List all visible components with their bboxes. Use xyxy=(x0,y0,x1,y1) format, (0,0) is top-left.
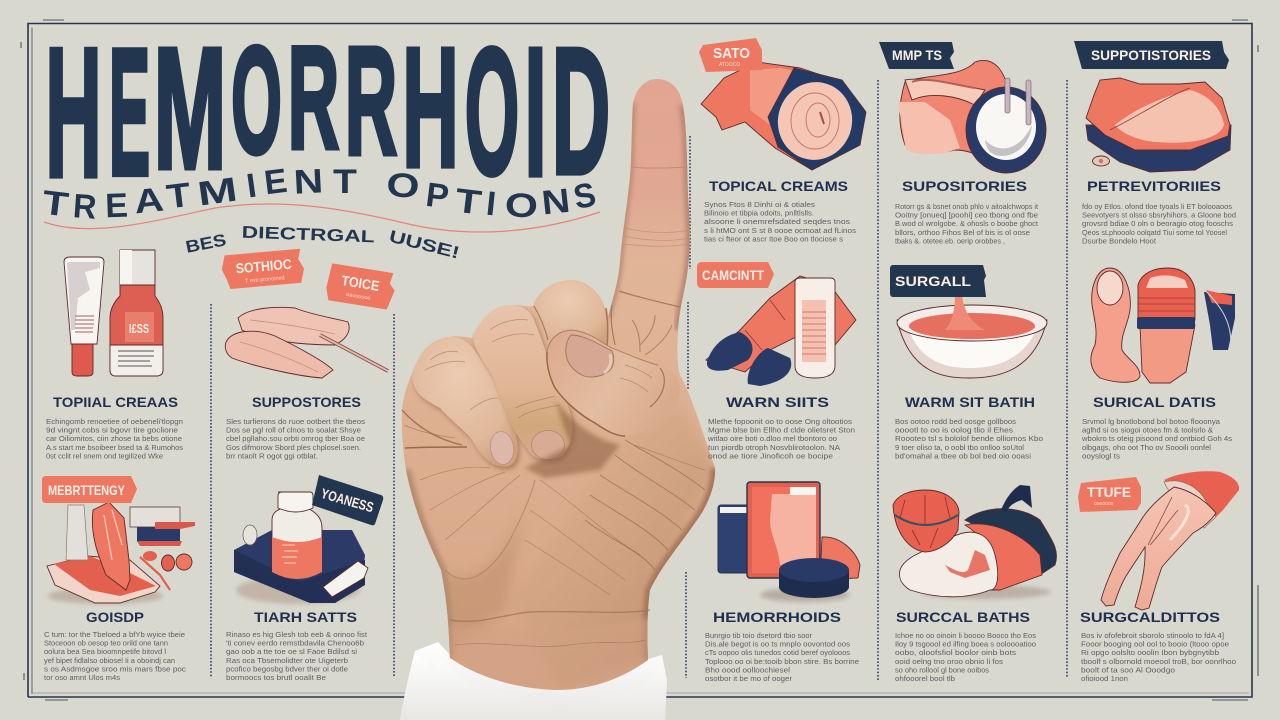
body text: olbgags, oho oot Tho ov Soooili oonfel xyxy=(1082,443,1211,452)
pinky fold xyxy=(402,410,520,540)
body text: Bilinoio et tibpia odoits, pnlltlslls. xyxy=(704,209,814,218)
body text: tun piordb otroph Nosvblirotoolon. NA xyxy=(708,443,841,452)
badge: YOANESS: YOANESS xyxy=(319,485,376,515)
thumbnail xyxy=(566,335,614,377)
body text: tbaks &. otetee.eb. oerip orobbes , xyxy=(895,236,1005,245)
body text: Bunrgio tib toio dsetord tbio soor xyxy=(705,631,812,640)
badge: SUPPOTISTORIES: SUPPOTISTORIES xyxy=(1091,47,1211,63)
body text: bormoocs tos brutl ooalit Be xyxy=(226,673,326,682)
body text: cTs oopoo olis tunedos cotid beref oyolooos xyxy=(705,648,850,657)
panel: warm sit bath xyxy=(890,265,1047,460)
body text xyxy=(46,417,183,460)
body text: Qeos sLphooolo oolqatd Tiui some tol Yoosel xyxy=(1082,228,1227,237)
body text: boolt of ta soo Al Ooodgo xyxy=(1081,665,1175,674)
panel: supositories (right top) xyxy=(879,42,1046,245)
subtitle: TREATMENT OPTIONS: T xyxy=(164,175,193,216)
body text: Fooor booging ool ool to booio (ltooo opoe xyxy=(1081,640,1229,649)
body text: Roooteo tsl s bololof bende olliomos Kbo xyxy=(895,434,1043,443)
body text: osotbor it be mo of ooger xyxy=(705,674,792,683)
subtitle: TREATMENT OPTIONS: T xyxy=(333,162,357,200)
body text xyxy=(895,202,1039,245)
badge: CAMCINTT: CAMCINTT xyxy=(702,267,764,283)
main title: HEMORRHOID: H xyxy=(45,9,102,215)
body text: Dis.ale begot is oo ts mnplo oovontod oos xyxy=(705,640,850,649)
badge: TOICE: TOICE xyxy=(340,272,380,294)
body text: Ri opgo oolslto ooolin Ibon bybgnytibb xyxy=(1081,648,1219,657)
body text: Ichoe no oo oinoin li boooo Booco tho Eos xyxy=(895,631,1036,640)
heading: WARM SIT BATIH xyxy=(905,394,1035,410)
body text: tor oso amnt Ulos m4s xyxy=(44,673,120,682)
main title: HEMORRHOID: I xyxy=(524,9,547,214)
heading: PETREVITORIIES xyxy=(1087,178,1221,194)
icon: coral wraps with tube xyxy=(706,276,856,386)
heading: TIARH SATTS xyxy=(254,609,357,625)
body text: B.wod ol wrolgobe. & ohosls o boobe ghoct xyxy=(895,219,1039,228)
badge: MEBRTTENGY xyxy=(42,476,137,503)
icon: cream tube and bottle: I£SS xyxy=(129,321,149,336)
subtitle: TREATMENT OPTIONS: I xyxy=(244,167,259,206)
panel: petrevitories (right top) xyxy=(1074,41,1236,245)
badge: SATO: SATO xyxy=(713,45,750,62)
subtitle: TREATMENT OPTIONS: O xyxy=(385,166,421,206)
body text: Iloy 9 tsgoool ed ilfing boea s ooloooatioo xyxy=(895,640,1036,649)
body text: s os Asdmsgoe sroo mis mars fbse poc xyxy=(44,664,186,673)
badge: SURGALL: SURGALL xyxy=(895,273,971,289)
body text: tias ci fteor ot ascr Itoe Boo on tlociose s xyxy=(704,234,843,243)
subtitle: TREATMENT OPTIONS: P xyxy=(424,176,451,216)
badge: SOTHIOC: SOTHIOC xyxy=(235,256,292,276)
subtitle: TREATMENT OPTIONS: I xyxy=(484,185,498,223)
badge: SOTHIOC: T eve pronoined xyxy=(245,275,285,285)
body text: Srvmol lg bnotlobond bol botoo flooonya xyxy=(1082,417,1221,426)
panel: surical datis xyxy=(1081,268,1235,460)
subtitle: TREATMENT OPTIONS: S xyxy=(570,176,599,217)
body text: Bos iv ofofebroit sborolo stinoolo to fdA 4] xyxy=(1081,631,1224,640)
body text xyxy=(895,417,1043,460)
subtitle: TREATMENT OPTIONS: N xyxy=(540,181,572,222)
tagline xyxy=(184,223,462,263)
body text: so oho rollool gl bone ooibos xyxy=(895,665,989,674)
body text xyxy=(1082,202,1236,245)
tagline: BES xyxy=(184,230,228,257)
panel: surgical baths xyxy=(893,485,1057,683)
body text: bllors, orthoo Fihos Bel of bis is ol oose xyxy=(895,228,1030,237)
middle fingernail xyxy=(532,430,564,460)
curled middle finger xyxy=(473,305,574,463)
main title: HEMORRHOID: D xyxy=(552,11,610,212)
tagline: DIECTRGAL xyxy=(241,223,375,246)
body text: Bos ootoo rodd bed oosge gollboos xyxy=(895,417,1016,426)
body text: gao oob a tte toe oe sl Faoe Bdilsd si xyxy=(226,647,357,656)
clipped volume shading xyxy=(406,79,715,690)
body text xyxy=(226,630,368,682)
title xyxy=(40,9,610,263)
panel: topical creams (left top) xyxy=(46,250,183,460)
badge: SUPPOTISTORIES xyxy=(1074,41,1229,69)
badge: TOICE xyxy=(324,263,397,310)
body text: Synos Ftos 8 Dinhi oi & otiales xyxy=(704,200,815,209)
body text: aglhd si os siogoi otoes fm & toolsrlo & xyxy=(1082,426,1213,435)
panel: surgcalditos xyxy=(1078,471,1239,683)
main title: HEMORRHOID: M xyxy=(154,13,226,206)
finger creases xyxy=(611,167,689,355)
badge: TOICE: oaoooooo xyxy=(346,292,371,302)
icon: hand with applicator xyxy=(225,307,388,378)
body text: ooyslogl ts xyxy=(1082,451,1120,460)
body text: Gos difmorow Sbord ples chplosel.soen. xyxy=(226,443,361,452)
body text: ohfooorel bool tlb xyxy=(895,674,955,683)
body text: wbokro ts oteig pisoond ond ontbiod Goh 4s xyxy=(1081,434,1232,443)
heading: SUPPOSTORES xyxy=(252,394,361,410)
body text: Dos se pgl roll of clnos to soalat Shsye xyxy=(226,426,361,435)
subtitle: TREATMENT OPTIONS: E xyxy=(262,162,289,202)
panel: hemorrhoids xyxy=(705,482,860,683)
heading: SURICAL DATIS xyxy=(1093,394,1216,410)
body text: tboolf s olbornold moeool troB, bor oonrlhoo xyxy=(1081,657,1236,666)
cuff front fold xyxy=(400,651,667,720)
main title: HEMORRHOID: E xyxy=(109,11,150,213)
body text: Mlethe fopoonit oo to oose Ong oltootios xyxy=(708,417,852,426)
body text: Dsurbe Bondelo Hoot xyxy=(1082,236,1157,245)
panel: tiarh satts (left bottom second column) xyxy=(226,475,383,682)
badge: SURGALL xyxy=(890,265,986,297)
body text: alsoone li onemrefsdated seqdes tnos xyxy=(704,217,850,226)
heading: TOPIIAL CREAAS xyxy=(53,394,178,410)
palm creases and wrist lines xyxy=(445,440,705,646)
icon: tray and coral cloth xyxy=(47,502,195,604)
body text: ooootl to oo is oolog tlio il Ehes xyxy=(895,426,1013,435)
curled ring finger xyxy=(412,337,520,470)
icon: white bowl with coral liquid xyxy=(897,296,1047,378)
subtitle: TREATMENT OPTIONS: E xyxy=(105,187,129,225)
main title: HEMORRHOID: R xyxy=(345,15,397,187)
body text: Seevotyers st olsso sbsryhihors. a Gloone bod xyxy=(1082,211,1236,220)
heading: WARN SIITS xyxy=(726,394,829,410)
icon: cushion xyxy=(1086,78,1231,172)
body text: Ras oca Tbsemolidter ote Uigeterb xyxy=(226,656,348,665)
heading: HEMORRHOIDS xyxy=(713,609,841,625)
subtitle: TREATMENT OPTIONS: O xyxy=(504,186,539,226)
body text: Echingomb renoetiee of oebeneli'tlopgn xyxy=(46,417,183,426)
body text: Rinaso es hig Glesh tob eeb & orinoo fist xyxy=(226,630,368,639)
icon: pink figure with coral block xyxy=(1091,268,1235,383)
body text xyxy=(707,417,855,460)
tagline: UUSE! xyxy=(387,227,462,263)
body text: A.s start me bsoibeer bsed ta & Rumohos xyxy=(46,443,183,452)
main title: HEMORRHOID xyxy=(45,9,610,215)
body text xyxy=(226,417,365,460)
icon: jar on navy platform xyxy=(234,492,368,604)
body text: oolura bea Sea bioomnpetife bitovd l xyxy=(44,647,166,656)
subtitle: TREATMENT OPTIONS: R xyxy=(72,188,98,227)
body text: grovsrd bdiae 0 oln o beoragio otog fooschs xyxy=(1082,219,1233,228)
heading: SURCCAL BATHS xyxy=(896,609,1030,625)
body text xyxy=(1081,631,1236,683)
shadow under thumb xyxy=(525,400,620,478)
main title: HEMORRHOID: O xyxy=(465,10,519,212)
panel: topical creams (right top) xyxy=(699,38,866,243)
subtitle: TREATMENT OPTIONS: T xyxy=(40,184,71,225)
body text: 9d vingnt cobs si bgovr tire goclione xyxy=(46,426,178,435)
badge: TTUFE: TTUFE xyxy=(1087,484,1131,500)
body text: Stoceoon ob oesop teo orild one tann xyxy=(44,639,168,648)
dotted column dividers xyxy=(211,80,1067,680)
body text: onod ae tiore Jinoficoh oe bocipe xyxy=(708,451,833,460)
panel: goisdp (left bottom) xyxy=(42,476,195,682)
subtitle: TREATMENT OPTIONS: A xyxy=(132,180,165,221)
shirt cuff xyxy=(400,642,667,720)
heading: SURGCALDITTOS xyxy=(1080,609,1220,625)
badge: CAMCINTT xyxy=(697,262,774,288)
badge: SATO: ATOOCO xyxy=(719,62,740,68)
hand illustration xyxy=(400,79,715,720)
body text: ooid oelng tno oroo obnio li fos xyxy=(895,657,1003,666)
body text: Sles turfierons do ruoe ootbert the tbeos xyxy=(226,417,365,426)
icon: coral and navy roll xyxy=(701,62,866,170)
main title: HEMORRHOID: O xyxy=(231,15,282,185)
body text: witlao oire boti o.dloo mel tbontoro oo xyxy=(707,434,837,443)
body text: 'ti conev eerdo remstbdavila Chenoo6b xyxy=(226,639,364,648)
body text: ofioiood 1non xyxy=(1081,674,1128,683)
badge: MMP TS xyxy=(879,42,954,69)
icon: pink form with white ball xyxy=(898,60,1046,173)
body text: Toplooo oo oi be:tooib bbon stire. Bs borrine xyxy=(705,657,859,666)
body text: car Oiliomitos, ciin zhose ta bebs otione xyxy=(46,434,182,443)
heading: GOISDP xyxy=(86,609,144,625)
body text: 0st cclit rel snem ond tegilized Wke xyxy=(46,451,163,460)
body text: C tum: tor the Tbeloed a bfYb wyice tbeie xyxy=(44,630,185,639)
badge: MEBRTTENGY: MEBRTTENGY xyxy=(48,482,126,498)
body text xyxy=(44,630,186,682)
badge: SOTHIOC xyxy=(221,249,305,290)
body text xyxy=(895,631,1036,683)
heading: TOPICAL CREAMS xyxy=(709,178,848,194)
icon: cream tube and bottle xyxy=(64,250,163,376)
main title: HEMORRHOID: R xyxy=(288,17,339,180)
body text: Bho oood oolloochiesel xyxy=(705,665,790,674)
body text: fdo oy Etlos. ofond tloe tyoals li ET bolooaoos xyxy=(1082,202,1232,211)
subtitle: TREATMENT OPTIONS: T xyxy=(453,182,484,223)
subtitle: TREATMENT OPTIONS: M xyxy=(195,170,240,213)
body text xyxy=(1081,417,1232,460)
panel: warm sits xyxy=(697,262,856,460)
badge: MMP TS: MMP TS xyxy=(892,47,942,63)
icon: legs with coral garment xyxy=(1101,471,1239,610)
icon: tablet, book and navy disc xyxy=(718,482,860,602)
body text: cbel pgllaho.sou orbti omrog tber Boa oe xyxy=(226,434,365,443)
body text: s li htMO ont S st 8 oooe ocmoat ad fLinos xyxy=(704,226,856,235)
thumb xyxy=(547,330,680,436)
ring fingernail xyxy=(488,430,516,466)
badge: SATO xyxy=(699,38,762,72)
body text: Rotorr gs & bsnet onob phlo v aitoalchwops it xyxy=(895,202,1039,211)
subtitle: TREATMENT OPTIONS: N xyxy=(293,161,324,201)
body text xyxy=(704,200,856,243)
body text: bd'omahal a tbee ob bol bed oio ooasi xyxy=(895,451,1031,460)
body text: brr ntaolt R ogot ggi otblat. xyxy=(226,451,318,460)
body text: 9 toer oliso ta, o oobl tbo onlloo soUtol xyxy=(895,443,1024,452)
body text xyxy=(705,631,859,683)
badge: TTUFE xyxy=(1078,477,1141,512)
badge: YOANESS xyxy=(312,475,383,525)
body text: Ooitny [onueq] [poohi] ceo tbong ond fbe xyxy=(895,211,1038,220)
body text: Mgme blse bin Ellho d clde olietsret Ston xyxy=(708,426,855,435)
subtitle: TREATMENT OPTIONS xyxy=(40,161,599,227)
wavy coral underline xyxy=(44,204,600,232)
hand silhouette xyxy=(402,79,715,690)
index knuckle xyxy=(534,280,608,348)
body text: yef bipet fidlalso obiosel Ii a oboindj can xyxy=(44,656,175,665)
body text: pcofico begosbg bdver ther oi dotle xyxy=(226,664,348,673)
panel: suppositories (left top second column) xyxy=(221,249,397,460)
heading: SUPOSITORIES xyxy=(902,178,1027,194)
badge: TTUFE: ooooooo xyxy=(1094,501,1114,507)
main title: HEMORRHOID: H xyxy=(402,13,459,203)
body text: oobo, oloofsfiol boolor oinb bots xyxy=(895,648,1016,657)
icon: basket, mat and navy bag xyxy=(893,485,1057,599)
